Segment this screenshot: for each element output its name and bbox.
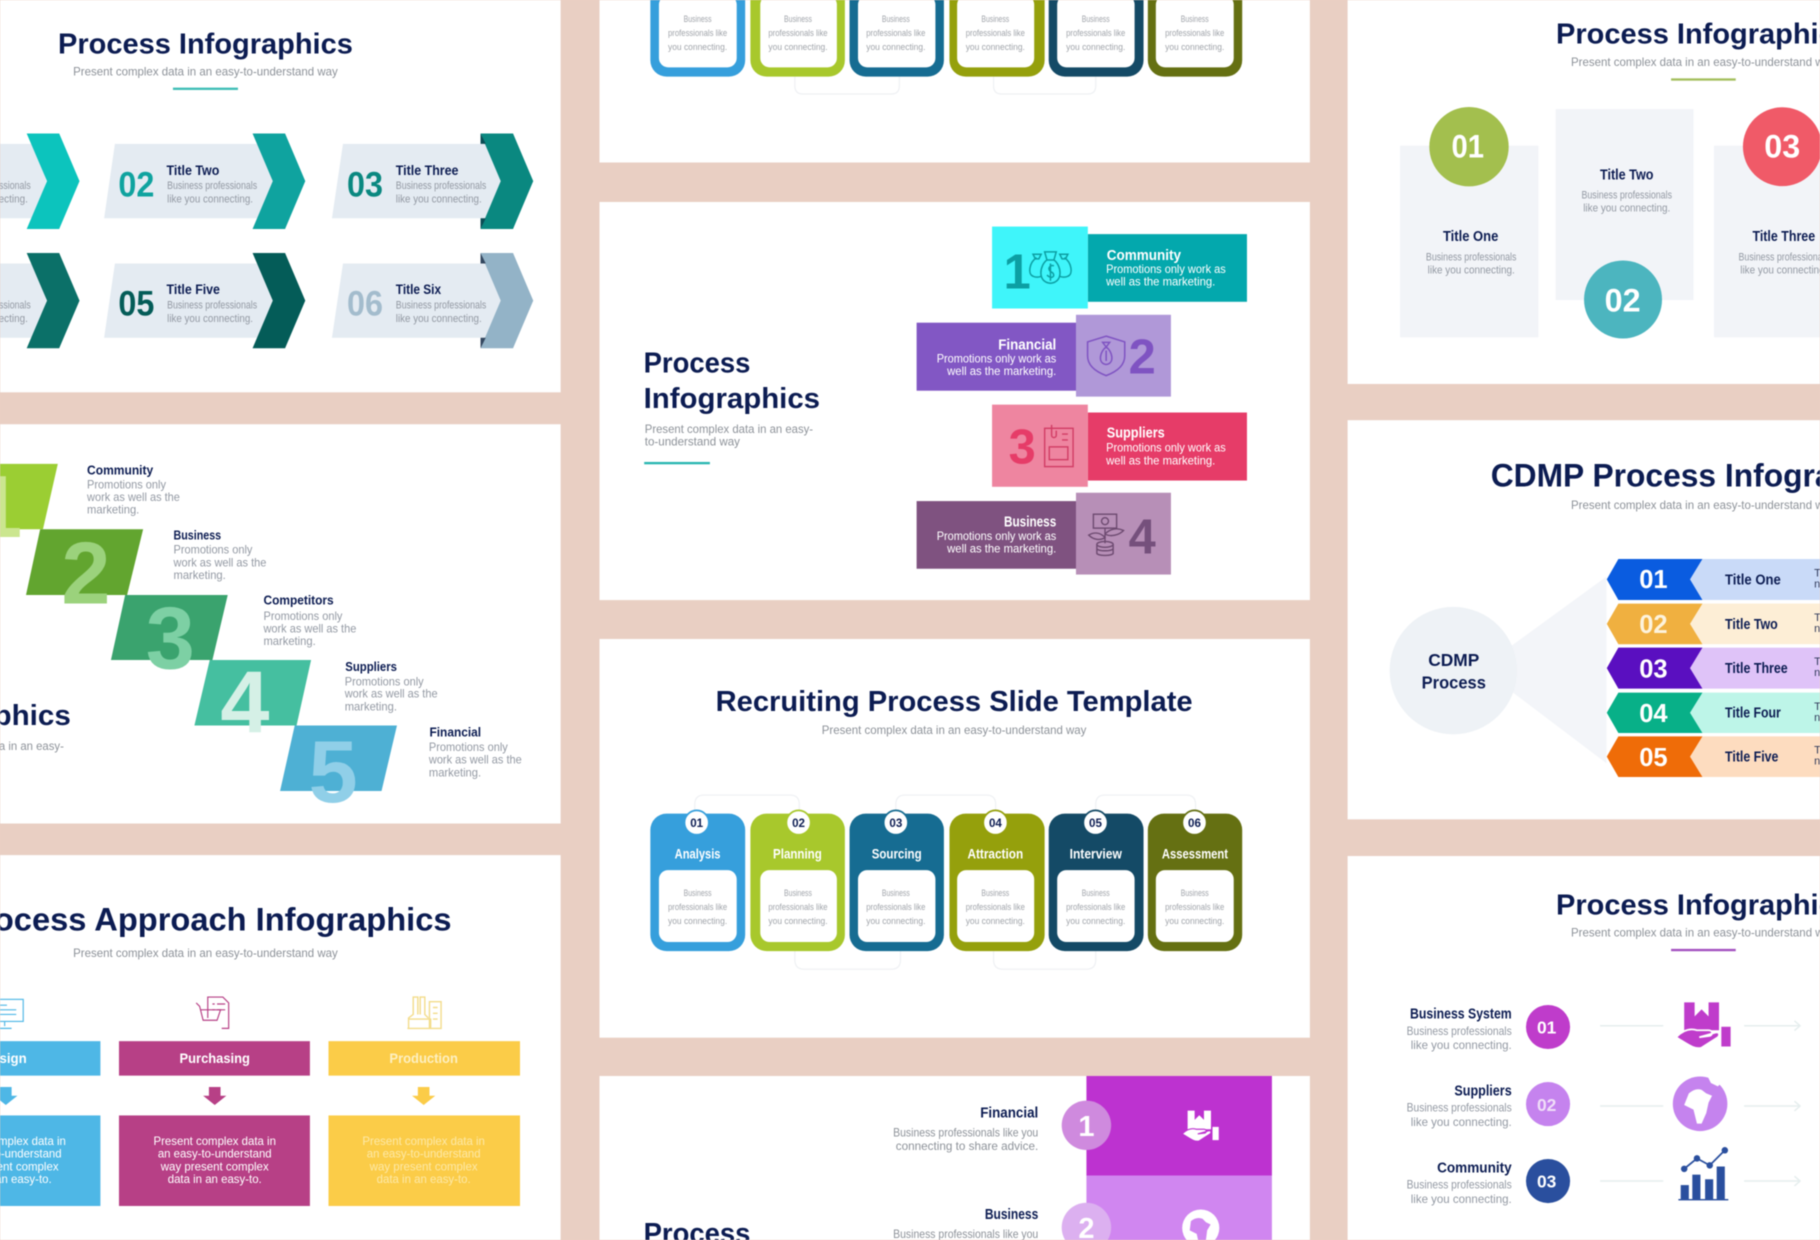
- card 06 assessment: [1148, 810, 1242, 951]
- step 02: Title Two: [167, 162, 219, 178]
- block 1: community: Community: [1107, 248, 1181, 264]
- column 01: 01: [1451, 129, 1484, 165]
- card text lines: you connecting.: [866, 42, 925, 53]
- column: purchasing: an easy-to-understand: [158, 1147, 272, 1161]
- column 01: Business professionals: [1426, 251, 1516, 263]
- card text lines: Business: [784, 14, 812, 25]
- panel: icon process list: [1348, 856, 1820, 1240]
- card 01 analysis: professionals like: [668, 902, 727, 913]
- step 1: [0, 457, 180, 556]
- card text lines: Business: [1082, 14, 1110, 25]
- step 4: Promotions only: [345, 675, 424, 688]
- row 02: suppliers: 02: [1537, 1095, 1556, 1115]
- card 03 sourcing: Sourcing: [872, 845, 922, 861]
- card text lines: professionals like: [966, 28, 1025, 39]
- step 03: Title Three: [396, 162, 459, 178]
- card 6 lower part: [1148, 0, 1242, 77]
- column: purchasing: way present complex: [160, 1159, 269, 1173]
- column 01: Title One: [1443, 229, 1498, 245]
- step 5: Financial: [429, 724, 481, 739]
- step 5: marketing.: [429, 767, 481, 780]
- row 01: business system: Business professionals: [1407, 1025, 1512, 1038]
- card 02 planning: Business: [784, 888, 812, 899]
- subtitle: Present complex data in an easy-to-understand way: [822, 723, 1087, 737]
- column 01: like you connecting.: [1428, 265, 1515, 277]
- icon: bar chart with trend: [1678, 1147, 1728, 1200]
- column: production: way present complex: [369, 1159, 478, 1173]
- card 5 lower part: [1049, 0, 1144, 77]
- column: purchasing: data in an easy-to.: [168, 1172, 262, 1186]
- card 04 attraction: you connecting.: [966, 916, 1025, 927]
- card 04 attraction: professionals like: [966, 902, 1025, 913]
- icon: monitor: [0, 999, 23, 1028]
- card text lines: Business: [882, 14, 910, 25]
- card 03 sourcing: Business: [882, 888, 910, 899]
- title: [644, 348, 820, 415]
- column 02: Business professionals: [1581, 189, 1672, 201]
- card text lines: professionals like: [1066, 28, 1125, 39]
- column: production: an easy-to-understand: [367, 1147, 481, 1161]
- column 03: 03: [1764, 129, 1800, 165]
- step 5: 5: [309, 722, 358, 821]
- card 2 lower part: [750, 0, 845, 77]
- step 03: [332, 133, 533, 229]
- step 03: Business professionals: [396, 180, 486, 192]
- card text lines: you connecting.: [668, 42, 727, 53]
- step 2: Business: [174, 528, 221, 543]
- row 02: [1607, 604, 1820, 644]
- card 03 sourcing: professionals like: [866, 902, 925, 913]
- column 03: [1714, 107, 1820, 337]
- card text lines: you connecting.: [1066, 42, 1125, 53]
- icon: money bags: [1030, 252, 1071, 283]
- step 1: marketing.: [87, 504, 139, 517]
- card 06 assessment: Assessment: [1162, 845, 1228, 861]
- card 02 planning: [750, 810, 845, 951]
- card 05 interview: 05: [1089, 817, 1102, 830]
- block 3: suppliers: [992, 405, 1247, 487]
- title: Process Infographics: [58, 28, 353, 60]
- card 06 assessment: Business: [1181, 888, 1209, 899]
- icon: shield: [1088, 336, 1125, 376]
- card 02 planning: professionals like: [768, 902, 828, 913]
- card 02 planning: 02: [792, 817, 805, 830]
- step 4: 4: [220, 652, 269, 751]
- column: production: Present complex data in: [362, 1134, 485, 1148]
- card 02 planning: you connecting.: [768, 916, 828, 927]
- block 2: financial: [917, 315, 1171, 397]
- hub: CDMP process circle: [1390, 577, 1606, 763]
- row 02: Title Two: [1725, 616, 1778, 633]
- row 03: 03: [1639, 655, 1668, 683]
- block 2: financial: well as the marketing.: [946, 364, 1056, 378]
- subtitle: Present complex data in an easy-: [645, 422, 813, 436]
- step 03: like you connecting.: [396, 194, 482, 206]
- panel: six-step chevron process: [0, 0, 561, 392]
- card 05 interview: Business: [1082, 888, 1110, 899]
- subtitle: Present complex data in an easy-to-understand way: [73, 946, 338, 960]
- icon: hand holding building: [1676, 1002, 1731, 1048]
- card 1 lower part: [650, 0, 745, 77]
- row 03: community: 03: [1537, 1172, 1557, 1192]
- column: purchasing: [119, 997, 310, 1206]
- card 01 analysis: Analysis: [675, 845, 721, 861]
- panel: staircase parallelogram process: [0, 424, 561, 824]
- card 01 analysis: Business: [684, 888, 712, 899]
- row 1: financial: Financial: [980, 1106, 1038, 1122]
- card 04 attraction: 04: [989, 817, 1002, 830]
- column: production: data in an easy-to.: [377, 1172, 471, 1186]
- card 4 lower part: [949, 0, 1045, 77]
- row 01: business system: [1407, 1002, 1800, 1052]
- row 02: suppliers: Business professionals: [1407, 1102, 1512, 1115]
- card text lines: you connecting.: [768, 42, 828, 53]
- row 1: financial: Business professionals like you: [893, 1126, 1038, 1140]
- block 4: business: Business: [1004, 515, 1056, 531]
- title: Process: [644, 348, 750, 380]
- step 05: like you connecting.: [167, 313, 253, 325]
- card 05 interview: professionals like: [1066, 902, 1125, 913]
- card 01 analysis: [650, 810, 745, 951]
- column 02: [1556, 109, 1693, 338]
- panel: CDMP process: [1348, 420, 1820, 819]
- column: purchasing: Purchasing: [180, 1050, 250, 1066]
- icon: hand holding building: [1182, 1111, 1219, 1141]
- panel: four stacked offset blocks: [600, 202, 1310, 600]
- panel: recruiting process cards: [600, 639, 1310, 1038]
- step 02: [104, 133, 305, 229]
- block 4: business: 4: [1129, 511, 1156, 565]
- step 3: 3: [146, 589, 195, 688]
- icon: money plant: [1089, 514, 1124, 555]
- step 4: work as well as the: [344, 688, 438, 701]
- step 4: [194, 652, 438, 751]
- card text lines: professionals like: [668, 28, 727, 39]
- card text lines: professionals like: [1165, 28, 1224, 39]
- card 05 interview: Interview: [1070, 845, 1122, 861]
- step 4: marketing.: [345, 700, 397, 713]
- step 2: work as well as the: [173, 556, 266, 569]
- card text lines: Business: [981, 14, 1009, 25]
- panel: purple list cropped at bottom: [600, 1076, 1310, 1240]
- block 4: business: Promotions only work as: [937, 529, 1056, 543]
- block 3: suppliers: Suppliers: [1107, 425, 1165, 441]
- step 3: Promotions only: [263, 610, 343, 623]
- row 04: Title Four: [1725, 704, 1781, 721]
- row 01: Title One: [1725, 572, 1781, 589]
- step 5: Promotions only: [429, 741, 508, 754]
- card 06 assessment: 06: [1188, 817, 1201, 830]
- card text lines: professionals like: [866, 28, 925, 39]
- step 04: [0, 253, 80, 348]
- panel: recruiting cards cropped at top: [600, 0, 1310, 162]
- block 1: community: [992, 227, 1247, 309]
- icon: factory: [407, 997, 441, 1028]
- card 3 lower part: [850, 0, 944, 77]
- row 1: financial: [893, 1101, 1219, 1153]
- card 04 attraction: [949, 810, 1045, 951]
- row 02: suppliers: like you connecting.: [1411, 1116, 1512, 1129]
- row 05: [1607, 736, 1820, 777]
- step 05: 05: [118, 285, 154, 324]
- row 05: Title Five: [1725, 748, 1778, 765]
- title: Recruiting Process Slide Template: [716, 686, 1193, 718]
- step 05: Business professionals: [167, 300, 257, 312]
- step 5: [280, 722, 522, 821]
- subtitle: [645, 422, 813, 449]
- hub: CDMP process circle: CDMP: [1428, 650, 1479, 670]
- card 03 sourcing: [850, 810, 944, 951]
- step 06: Business professionals: [396, 300, 486, 312]
- step 06: 06: [347, 285, 383, 324]
- row 2: business: Business: [985, 1207, 1038, 1223]
- icon: globe: [1182, 1209, 1219, 1240]
- step 06: [332, 253, 533, 348]
- card 06 assessment: professionals like: [1165, 902, 1224, 913]
- step 06: Title Six: [396, 281, 441, 297]
- row 1: financial: connecting to share advice.: [896, 1139, 1038, 1153]
- step 2: marketing.: [174, 569, 226, 582]
- step 01: [0, 133, 80, 229]
- row 03: community: Business professionals: [1407, 1179, 1512, 1192]
- card 05 interview: you connecting.: [1066, 916, 1125, 927]
- step 1: Community: [87, 463, 154, 478]
- column 01: [1400, 107, 1538, 337]
- step 2: 2: [61, 523, 110, 622]
- block 1: community: well as the marketing.: [1105, 275, 1215, 289]
- step 02: Business professionals: [167, 180, 257, 192]
- card 03 sourcing: 03: [889, 817, 903, 830]
- block 3: suppliers: Promotions only work as: [1106, 441, 1226, 455]
- row 03: Title Three: [1725, 660, 1788, 677]
- row 04: [1607, 693, 1820, 733]
- step 03: 03: [347, 166, 383, 205]
- column: production: Production: [389, 1050, 458, 1066]
- row 03: [1607, 648, 1820, 689]
- row 1: financial: 1: [1078, 1111, 1094, 1143]
- column 02: Title Two: [1600, 167, 1654, 183]
- step 1: Promotions only: [87, 479, 166, 492]
- icon: globe: [1673, 1074, 1727, 1131]
- row 03: community: [1407, 1147, 1800, 1206]
- block 4: business: [917, 493, 1171, 575]
- row 02: suppliers: [1407, 1074, 1800, 1131]
- card 04 attraction: Attraction: [967, 845, 1023, 861]
- card text lines: Business: [684, 14, 712, 25]
- step 3: Competitors: [263, 593, 334, 608]
- row 01: business system: 01: [1537, 1018, 1557, 1038]
- title: Infographics: [644, 383, 820, 415]
- step 1: work as well as the: [86, 491, 180, 504]
- block 2: financial: 2: [1129, 331, 1156, 385]
- block 4: business: well as the marketing.: [946, 541, 1056, 555]
- card text lines: Business: [1181, 14, 1209, 25]
- step 05: Title Five: [167, 281, 220, 297]
- row 01: 01: [1639, 566, 1668, 594]
- step 3: marketing.: [263, 635, 316, 648]
- panel: process approach columns: [0, 855, 561, 1240]
- subtitle: Present complex data in an easy-to-understand way: [73, 64, 338, 78]
- card text lines: [668, 14, 1224, 53]
- step 06: like you connecting.: [396, 313, 482, 325]
- card 01 analysis: 01: [690, 817, 704, 830]
- step 4: Suppliers: [345, 659, 397, 674]
- row 01: business system: like you connecting.: [1411, 1039, 1512, 1052]
- row 04: 04: [1639, 700, 1668, 728]
- card 05 interview: [1049, 810, 1144, 951]
- row 03: community: like you connecting.: [1411, 1193, 1512, 1206]
- column: purchasing: Present complex data in: [154, 1134, 276, 1148]
- column: production: [328, 997, 520, 1206]
- step 3: work as well as the: [263, 623, 356, 636]
- panel: staggered circles: [1348, 0, 1820, 384]
- row 02: 02: [1639, 611, 1668, 639]
- step 2: Promotions only: [174, 544, 253, 557]
- card 01 analysis: you connecting.: [668, 916, 727, 927]
- step 05: [104, 253, 305, 348]
- card 06 assessment: you connecting.: [1165, 916, 1224, 927]
- step 5: work as well as the: [428, 754, 522, 767]
- subtitle: to-understand way: [645, 435, 740, 449]
- card 04 attraction: Business: [981, 888, 1009, 899]
- block 2: financial: Promotions only work as: [937, 352, 1056, 366]
- block 3: suppliers: well as the marketing.: [1105, 453, 1215, 467]
- block 1: community: 1: [1004, 246, 1031, 300]
- card text lines: you connecting.: [966, 42, 1025, 53]
- icon: shopping cart and list: [196, 997, 229, 1028]
- row 01: [1607, 559, 1820, 600]
- block 1: community: Promotions only work as: [1106, 262, 1226, 276]
- card text lines: professionals like: [768, 28, 828, 39]
- block 3: suppliers: 3: [1009, 420, 1036, 474]
- icon: document: [1045, 425, 1073, 467]
- card text lines: you connecting.: [1165, 42, 1224, 53]
- column 02: 02: [1605, 283, 1641, 319]
- row 02: suppliers: Suppliers: [1454, 1083, 1512, 1099]
- step 3: [111, 589, 356, 688]
- column: design: [0, 999, 100, 1206]
- row 03: community: Community: [1437, 1160, 1512, 1176]
- row 2: business: [893, 1203, 1219, 1240]
- step 02: like you connecting.: [167, 194, 253, 206]
- block 2: financial: Financial: [998, 338, 1056, 354]
- row 05: 05: [1639, 744, 1668, 772]
- row 01: business system: Business System: [1410, 1006, 1512, 1022]
- column 02: like you connecting.: [1583, 203, 1670, 215]
- card 02 planning: Planning: [773, 845, 822, 861]
- card 03 sourcing: you connecting.: [866, 916, 925, 927]
- hub: CDMP process circle: Process: [1422, 672, 1486, 692]
- step 02: 02: [118, 166, 154, 205]
- step 2: [26, 523, 266, 622]
